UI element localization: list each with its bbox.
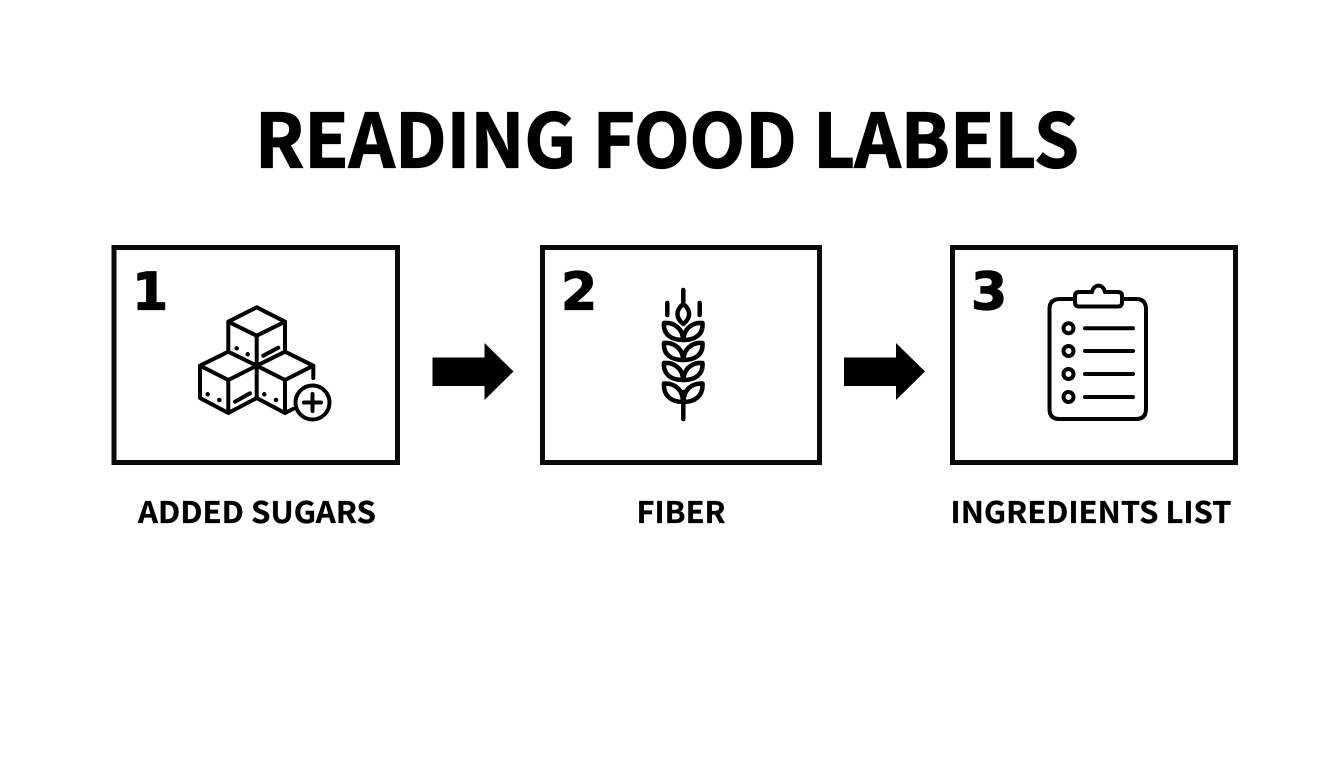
panel frame 2 xyxy=(542,248,820,462)
panel: step 3 ingredients list xyxy=(952,248,1236,462)
arrow 1 to 2 xyxy=(432,343,514,400)
icon: clipboard checklist xyxy=(1050,286,1146,419)
icon: wheat xyxy=(664,290,703,419)
panel: step 1 added sugars xyxy=(114,248,398,462)
label: ingredients list: INGREDIENTS LIST xyxy=(950,488,1232,532)
step number 2: 2 xyxy=(561,262,597,322)
arrow 2 to 3 xyxy=(844,343,925,400)
label: added sugars: ADDED SUGARS xyxy=(137,488,376,532)
panel frame 1 xyxy=(114,248,398,462)
panel frame 3 xyxy=(952,248,1236,462)
icon: sugar cubes with plus xyxy=(200,307,330,420)
step number 1: 1 xyxy=(132,262,168,322)
step number 3: 3 xyxy=(971,262,1007,322)
title: READING FOOD LABELS xyxy=(255,82,1079,190)
label: fiber: FIBER xyxy=(636,488,726,532)
panel: step 2 fiber xyxy=(542,248,820,462)
